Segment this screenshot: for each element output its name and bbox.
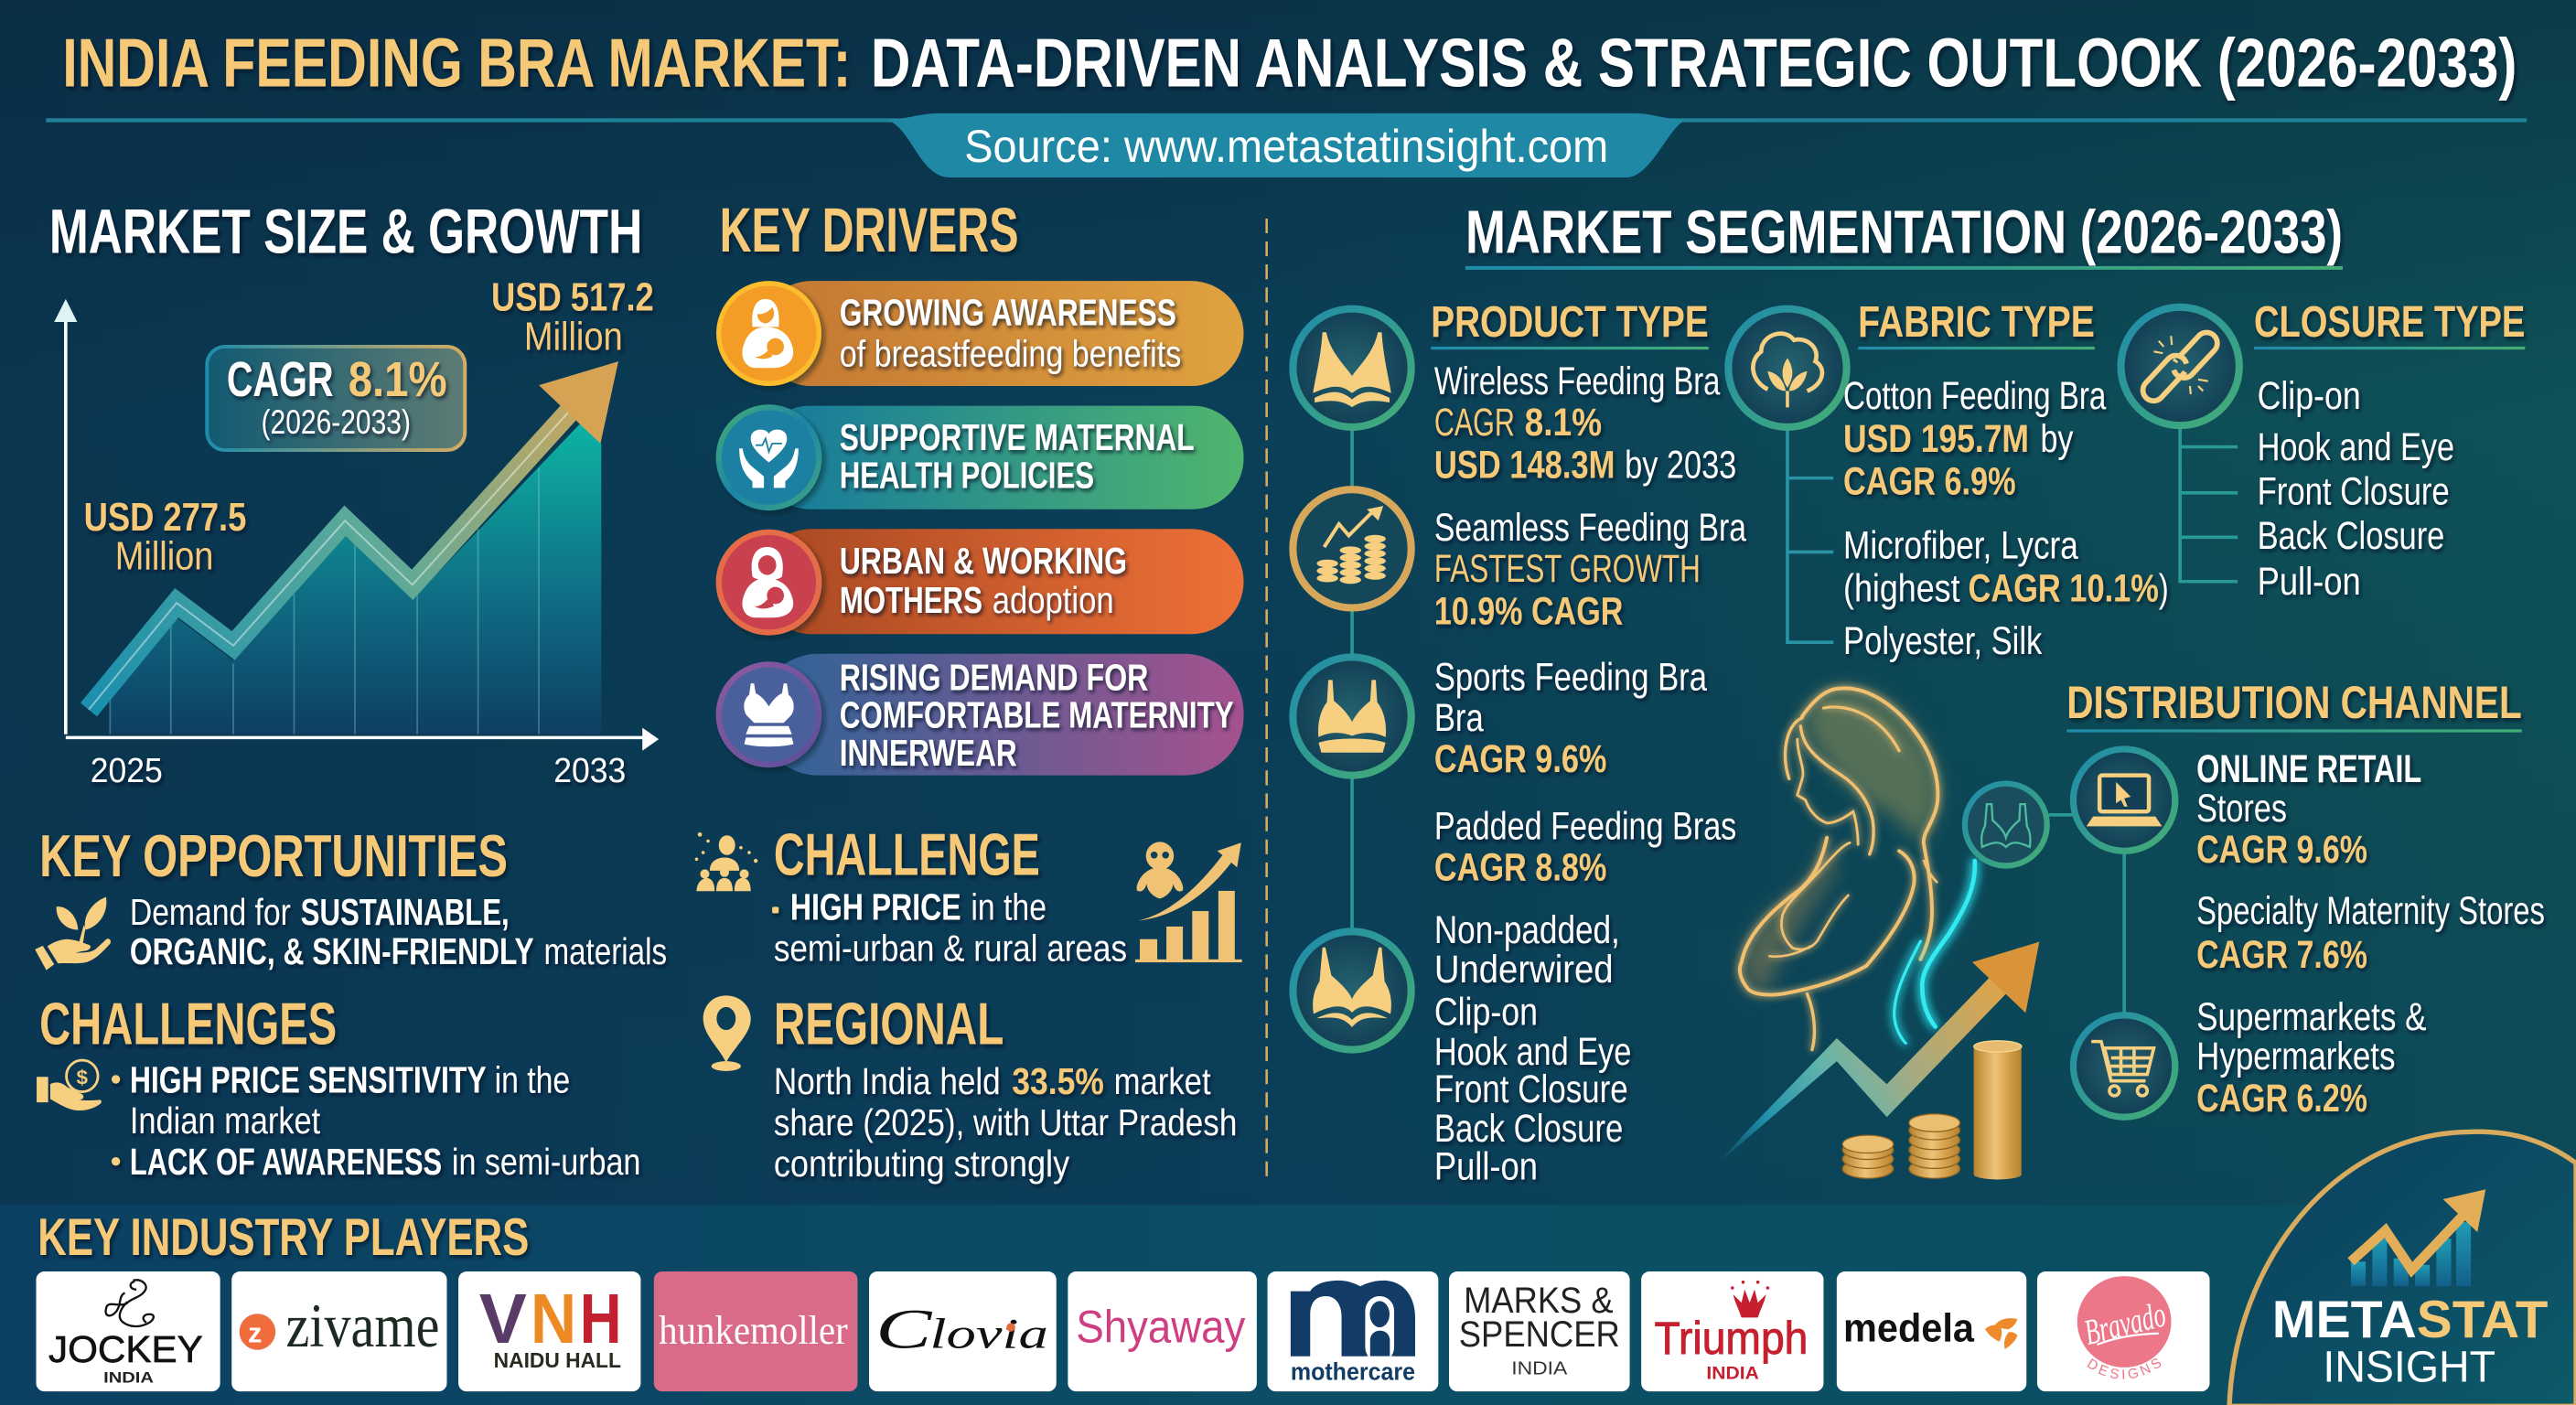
logo: Metastat Insight bbox=[2229, 1132, 2576, 1405]
logo: Zivame: z bbox=[248, 1317, 262, 1348]
heading: key opportunities: KEY OPPORTUNITIES bbox=[39, 822, 508, 889]
text: regional detail: North India held bbox=[774, 1060, 1001, 1102]
heading: key drivers: KEY DRIVERS bbox=[720, 196, 1018, 265]
icon: plant in hand bbox=[35, 897, 111, 971]
coins and gold bar bbox=[1842, 1041, 2022, 1179]
logo: Clovia bbox=[869, 1271, 1057, 1391]
text: fabric items: CAGR 10.1% bbox=[1969, 566, 2159, 609]
text: opportunity: materials bbox=[543, 930, 667, 972]
panel: product type bbox=[1293, 297, 1746, 1187]
text: product items: Sports Feeding Bra bbox=[1434, 655, 1707, 698]
driver: working mothers bbox=[719, 529, 1244, 634]
text: product items: Back Closure bbox=[1434, 1107, 1623, 1150]
logo: Medela bbox=[1837, 1271, 2026, 1391]
text: regional detail: market bbox=[1114, 1060, 1211, 1102]
callout: CAGR: CAGR bbox=[227, 352, 334, 407]
text: challenge bullets: LACK OF AWARENESS bbox=[130, 1141, 442, 1183]
area chart bbox=[54, 299, 659, 751]
heading: fabric type: FABRIC TYPE bbox=[1858, 297, 2095, 347]
driver: comfortable innerwear: INNERWEAR bbox=[840, 732, 1017, 774]
text: distribution items: Hypermarkets bbox=[2196, 1035, 2395, 1078]
icon: sports bra bbox=[1293, 657, 1411, 776]
heading: regional: REGIONAL bbox=[774, 990, 1004, 1056]
title: INDIA FEEDING BRA MARKET: bbox=[62, 24, 851, 101]
text: product items: by 2033 bbox=[1625, 444, 1736, 487]
value labels: USD 277.5 bbox=[84, 495, 246, 540]
panel: fabric type bbox=[1728, 297, 2169, 662]
text: fabric items bbox=[1843, 374, 2169, 662]
text: closure items: Hook and Eye bbox=[2258, 425, 2454, 468]
value labels: Million bbox=[524, 315, 623, 359]
text: regional detail: contributing strongly bbox=[774, 1142, 1070, 1185]
heading: challenges: CHALLENGES bbox=[39, 990, 337, 1056]
text: high price: in the bbox=[971, 886, 1046, 928]
text: product items: CAGR bbox=[1434, 401, 1515, 444]
logo: Metastat Insight: INSIGHT bbox=[2323, 1342, 2496, 1391]
driver: growing awareness: GROWING AWARENESS bbox=[840, 292, 1176, 334]
text: product items: Front Closure bbox=[1434, 1067, 1628, 1110]
text: challenge bullets: in the bbox=[495, 1058, 570, 1100]
logo: Zivame bbox=[231, 1271, 446, 1391]
driver: comfortable innerwear: RISING DEMAND FOR bbox=[840, 656, 1148, 698]
icon: location pin bbox=[703, 995, 751, 1071]
text: distribution items: CAGR 7.6% bbox=[2196, 933, 2367, 976]
text: opportunity: ORGANIC, & SKIN-FRIENDLY bbox=[130, 930, 534, 972]
text: product items: Non-padded, bbox=[1434, 908, 1620, 951]
logo: Mothercare: mothercare bbox=[1291, 1358, 1415, 1386]
text: regional detail: share (2025), with Uttar Pradesh bbox=[774, 1101, 1237, 1143]
logo: Marks and Spencer: MARKS & bbox=[1464, 1281, 1614, 1321]
text: product items: Pull-on bbox=[1434, 1144, 1538, 1187]
text: challenge bullets: HIGH PRICE SENSITIVITY bbox=[130, 1058, 487, 1100]
text: opportunity bbox=[130, 891, 667, 972]
text: distribution items: ONLINE RETAIL bbox=[2196, 747, 2421, 790]
driver: growing awareness bbox=[719, 281, 1244, 386]
logo: VNH Naidu Hall: H bbox=[580, 1280, 622, 1358]
icon: hand with coin: $ bbox=[77, 1066, 89, 1089]
text: distribution items: CAGR 6.2% bbox=[2196, 1077, 2367, 1120]
panel: key industry players bbox=[0, 1206, 2306, 1405]
heading: challenge: CHALLENGE bbox=[774, 820, 1040, 887]
logo: Marks and Spencer bbox=[1449, 1271, 1630, 1391]
logo: Triumph: INDIA bbox=[1706, 1364, 1759, 1384]
text: product items: Seamless Feeding Bra bbox=[1434, 506, 1746, 549]
heading: market size: MARKET SIZE & GROWTH bbox=[49, 198, 642, 267]
text: distribution items: Supermarkets & bbox=[2196, 995, 2427, 1038]
text: challenge bullets: in semi-urban bbox=[452, 1141, 640, 1183]
value labels bbox=[84, 274, 654, 789]
text: closure items: Clip-on bbox=[2258, 374, 2361, 417]
logo: Triumph bbox=[1641, 1271, 1823, 1391]
driver: comfortable innerwear: COMFORTABLE MATERNITY bbox=[840, 694, 1234, 736]
driver: working mothers: URBAN & WORKING bbox=[840, 540, 1127, 582]
logo: Mothercare bbox=[1268, 1271, 1438, 1391]
callout: CAGR: 8.1% bbox=[349, 352, 446, 407]
text: closure items bbox=[2258, 374, 2454, 603]
text: challenge bullets bbox=[112, 1058, 640, 1183]
logo: Jockey bbox=[37, 1271, 220, 1391]
logo: Triumph: Triumph bbox=[1654, 1312, 1808, 1364]
logo: VNH Naidu Hall: N bbox=[531, 1280, 576, 1358]
text: closure items: Pull-on bbox=[2258, 560, 2361, 603]
logo: VNH Naidu Hall bbox=[458, 1271, 640, 1391]
logo: Marks and Spencer: INDIA bbox=[1511, 1357, 1568, 1378]
text: fabric items: Polyester, Silk bbox=[1843, 619, 2043, 662]
text: product items: Clip-on bbox=[1434, 991, 1538, 1034]
icon: small bra bbox=[1965, 784, 2047, 865]
logo: Jockey: JOCKEY bbox=[48, 1328, 203, 1370]
text: product items: USD 148.3M bbox=[1434, 444, 1615, 487]
logo: Hunkemoller bbox=[654, 1271, 857, 1391]
logo: Clovia: C bbox=[875, 1300, 933, 1361]
panel: challenge bbox=[695, 820, 1242, 970]
text: fabric items: USD 195.7M bbox=[1843, 417, 2029, 460]
text: challenge bullets: Indian market bbox=[130, 1099, 320, 1142]
panel: distribution channel bbox=[1965, 676, 2545, 1120]
panel: market size and growth bbox=[49, 198, 659, 789]
logo: Bravado bbox=[2036, 1271, 2210, 1392]
panel: market segmentation bbox=[1293, 199, 2545, 1187]
text: high price: HIGH PRICE bbox=[790, 886, 961, 928]
text: product items: Wireless Feeding Bra bbox=[1434, 359, 1721, 402]
panel: regional bbox=[703, 990, 1237, 1185]
logo: Hunkemoller: hunkemoller bbox=[659, 1307, 848, 1353]
text: product items: Padded Feeding Bras bbox=[1434, 805, 1736, 848]
logo: Zivame: zivame bbox=[285, 1291, 439, 1360]
text: fabric items: (highest bbox=[1843, 566, 1960, 609]
heading: key players: KEY INDUSTRY PLAYERS bbox=[38, 1208, 529, 1267]
logo: Jockey: INDIA bbox=[103, 1369, 154, 1387]
logo: Shyaway: Shyaway bbox=[1076, 1300, 1246, 1352]
text: fabric items: Cotton Feeding Bra bbox=[1843, 374, 2107, 417]
text: product items bbox=[1434, 359, 1746, 1187]
title bbox=[62, 24, 2517, 101]
heading: segmentation: MARKET SEGMENTATION (2026-2033) bbox=[1465, 199, 2343, 267]
logo: Shyaway bbox=[1068, 1271, 1257, 1391]
text: product items: FASTEST GROWTH bbox=[1434, 547, 1701, 590]
value labels: 2033 bbox=[553, 751, 626, 789]
text: product items: Underwired bbox=[1434, 948, 1614, 991]
source banner: Source: www.metastatinsight.com bbox=[964, 120, 1608, 172]
text: product items: Bra bbox=[1434, 696, 1484, 739]
panel: challenges bbox=[37, 990, 640, 1183]
logo: Marks and Spencer: SPENCER bbox=[1459, 1314, 1620, 1355]
value labels: 2025 bbox=[91, 751, 163, 789]
driver: working mothers: adoption bbox=[993, 579, 1114, 621]
heading: product type: PRODUCT TYPE bbox=[1431, 297, 1709, 347]
text: opportunity: SUSTAINABLE, bbox=[301, 891, 510, 933]
text: product items: 8.1% bbox=[1525, 401, 1602, 444]
logo: VNH Naidu Hall: NAIDU HALL bbox=[494, 1348, 621, 1372]
text: fabric items: ) bbox=[2159, 566, 2169, 609]
icon: crowd bbox=[695, 832, 757, 891]
logo: VNH Naidu Hall: V bbox=[479, 1280, 527, 1358]
text: product items: CAGR 9.6% bbox=[1434, 737, 1606, 780]
icon: underwired bra bbox=[1293, 931, 1411, 1050]
driver: maternal health: SUPPORTIVE MATERNAL bbox=[840, 416, 1195, 458]
text: closure items: Front Closure bbox=[2258, 469, 2450, 512]
callout: CAGR bbox=[207, 347, 465, 450]
text: product items: 10.9% CAGR bbox=[1434, 589, 1623, 632]
logo: Bravado: DESIGNS bbox=[2088, 1358, 2161, 1379]
text: product items: CAGR 8.8% bbox=[1434, 846, 1606, 889]
panel: closure type bbox=[2121, 297, 2525, 603]
text: high price bbox=[772, 886, 1127, 970]
text: fabric items: CAGR 6.9% bbox=[1843, 460, 2016, 503]
text: high price: semi-urban & rural areas bbox=[774, 928, 1127, 970]
value labels: Million bbox=[115, 533, 213, 578]
driver: maternal health bbox=[719, 406, 1244, 509]
panel: key drivers bbox=[719, 196, 1244, 776]
logo: Bravado: Bravado bbox=[2080, 1294, 2170, 1353]
text: regional detail: 33.5% bbox=[1012, 1060, 1104, 1102]
icon: chain link bbox=[2121, 307, 2239, 425]
logo: Metastat Insight: STAT bbox=[2417, 1291, 2548, 1349]
text: distribution items: Stores bbox=[2196, 787, 2287, 830]
text: closure items: Back Closure bbox=[2258, 514, 2444, 557]
logo: Metastat Insight: META bbox=[2272, 1291, 2417, 1349]
icon: person with rising bars bbox=[1135, 842, 1242, 962]
logo: Clovia: lovia bbox=[929, 1311, 1048, 1358]
text: distribution items: CAGR 9.6% bbox=[2196, 828, 2367, 871]
text: regional detail bbox=[774, 1060, 1237, 1185]
icon: wireless bra bbox=[1293, 309, 1411, 427]
icon: shopping cart bbox=[2073, 1015, 2175, 1117]
panel: key opportunities bbox=[35, 822, 667, 972]
logo: Medela: medela bbox=[1843, 1307, 1975, 1351]
icon: laptop bbox=[2073, 749, 2175, 851]
text: fabric items: Microfiber, Lycra bbox=[1843, 524, 2078, 567]
icon: hand with coin bbox=[37, 1060, 102, 1110]
driver: working mothers: MOTHERS bbox=[840, 579, 982, 621]
driver: growing awareness: of breastfeeding benefits bbox=[840, 332, 1181, 374]
icon: seamless growth coins bbox=[1293, 489, 1411, 607]
value labels: USD 517.2 bbox=[491, 274, 654, 319]
driver: maternal health: HEALTH POLICIES bbox=[840, 454, 1094, 496]
text: opportunity: Demand for bbox=[130, 891, 291, 933]
illustration: expectant mother with growth arrow bbox=[1719, 688, 2039, 1179]
icon: cotton bbox=[1728, 309, 1847, 427]
driver: comfortable innerwear bbox=[719, 654, 1244, 776]
text: fabric items: by bbox=[2041, 417, 2074, 460]
text: distribution items bbox=[2196, 747, 2545, 1120]
text: product items: Hook and Eye bbox=[1434, 1030, 1631, 1073]
callout: CAGR: (2026-2033) bbox=[262, 403, 411, 441]
